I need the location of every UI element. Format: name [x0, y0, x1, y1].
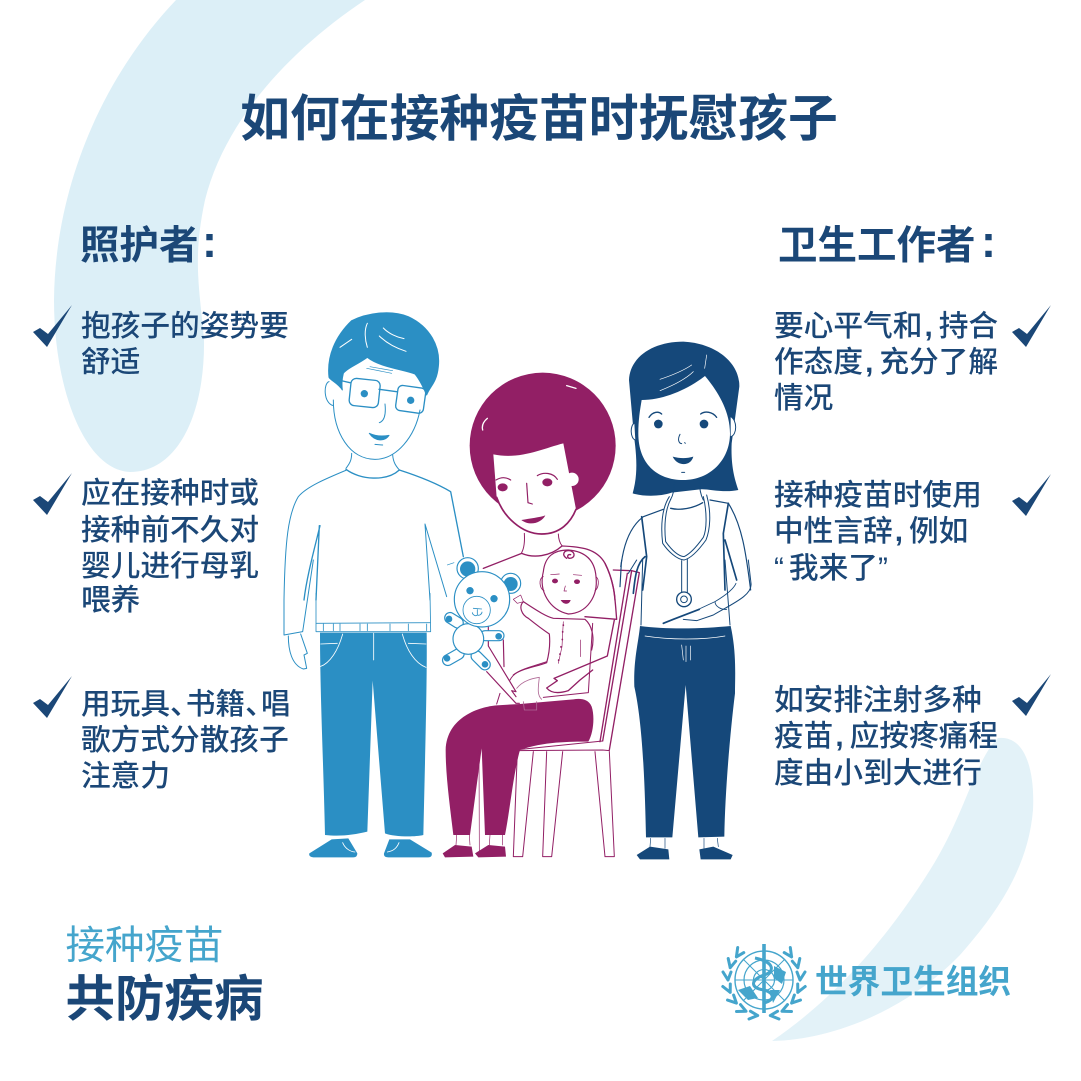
figure: health worker	[620, 342, 751, 859]
right item 3: 疫苗,应按疼痛程	[774, 720, 998, 753]
right checklist	[774, 305, 1051, 790]
shoes	[637, 847, 733, 859]
mother's trousers	[446, 699, 593, 835]
chest piece	[677, 592, 691, 607]
WHO logo	[723, 944, 1011, 1019]
left checklist	[33, 305, 290, 793]
icon: check 3	[33, 676, 72, 718]
figure: father	[284, 313, 463, 857]
left item 1: 舒适	[81, 346, 140, 379]
chair back	[600, 570, 639, 750]
illustration: family and health worker	[284, 313, 751, 859]
slogan line 1: 接种疫苗	[66, 924, 224, 968]
slogan line 2: 共防疾病	[66, 972, 264, 1027]
left item 3: 歌方式分散孩子	[81, 724, 289, 757]
mother's shoes	[443, 845, 506, 857]
left item 2: 应在接种时或	[81, 477, 259, 510]
right item 2: 接种疫苗时使用	[774, 479, 982, 512]
organisation name: 世界卫生组织	[815, 963, 1011, 1000]
right item 2: 中性言辞,例如	[774, 515, 968, 548]
figure: mother with baby, chair	[443, 373, 639, 857]
left item 2: 婴儿进行母乳	[81, 550, 259, 583]
mother's arm under baby	[547, 563, 617, 693]
left item 2: 接种前不久对	[81, 514, 259, 547]
background swoosh: bottom right	[772, 738, 1033, 1041]
left item 3: 用玩具、书籍、唱	[81, 688, 290, 721]
right item 2: “我来了”	[774, 552, 888, 585]
chair seat and legs	[513, 741, 614, 857]
icon: WHO emblem	[723, 944, 805, 1019]
trousers	[634, 626, 735, 837]
father trousers	[320, 633, 427, 836]
background swoosh: top left	[54, 0, 365, 472]
father sleeve and hand	[284, 560, 313, 669]
icon: check 2	[1012, 474, 1051, 516]
right item 1: 作态度,充分了解	[774, 346, 998, 379]
right item 1: 情况	[774, 382, 833, 415]
heading colon: :	[981, 216, 996, 267]
icon: check 1	[33, 305, 72, 347]
right item 3: 度由小到大进行	[774, 757, 982, 790]
left item 2: 喂养	[81, 584, 140, 617]
right item 1: 要心平气和,持合	[774, 310, 998, 343]
father shoes	[309, 838, 432, 857]
father sweater hem	[316, 593, 431, 632]
icon: check 2	[33, 473, 72, 515]
title: 如何在接种疫苗时抚慰孩子	[240, 91, 838, 147]
icon: check 3	[1012, 674, 1051, 716]
teddy bear	[441, 558, 521, 672]
slogan	[66, 924, 264, 1027]
heading: caregivers: 照护者	[80, 224, 198, 268]
baby hand on mother's lap	[517, 677, 542, 710]
stethoscope	[662, 495, 710, 560]
baby	[542, 550, 596, 614]
mother's torso and arms	[487, 590, 519, 703]
right item 3: 如安排注射多种	[774, 684, 982, 717]
syringe	[663, 609, 699, 623]
icon: check 1	[1012, 305, 1051, 347]
left item 1: 抱孩子的姿势要	[81, 310, 289, 343]
heading colon: :	[202, 216, 217, 267]
left item 3: 注意力	[81, 760, 170, 793]
father pockets	[320, 633, 426, 667]
arm and sleeve lines	[621, 560, 751, 625]
heading: health workers: 卫生工作者	[778, 224, 976, 268]
